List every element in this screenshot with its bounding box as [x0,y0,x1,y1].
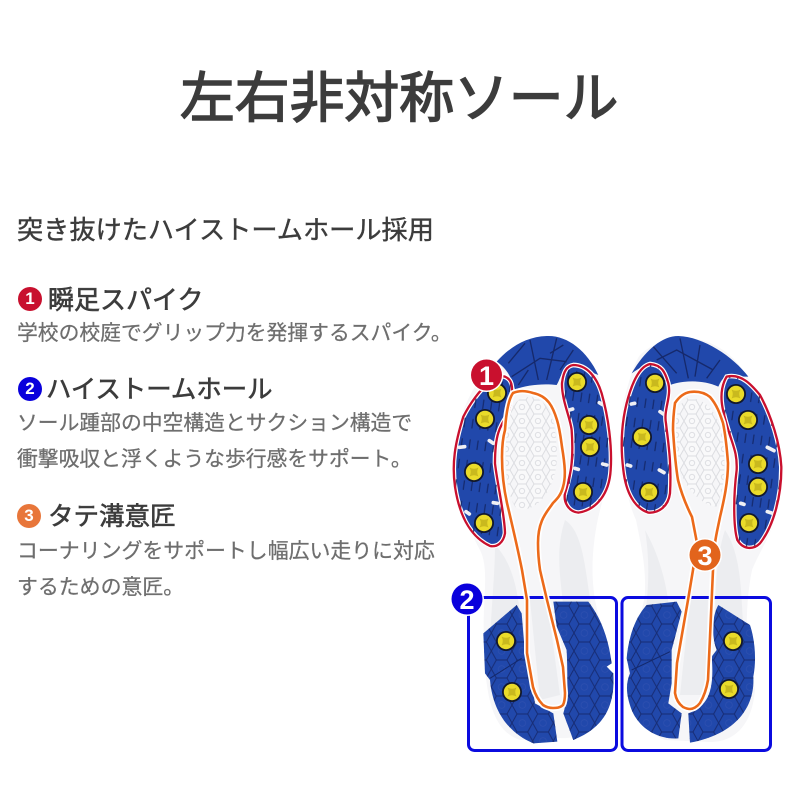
left toe tread [497,336,598,389]
left heel tread outer [483,605,557,743]
callout badge 3: 3 [697,541,713,571]
badge 2: 2 [25,379,35,398]
badge 1 [18,287,42,311]
left heel tread inner [553,602,614,740]
right orange groove [673,392,728,709]
right insole hexagon area [675,398,724,507]
right shoe white midsole [621,338,781,742]
right shoe [621,336,781,743]
left shoe [454,336,614,743]
description 3 [17,540,435,599]
badge 2 [18,377,42,401]
badge 3 [17,504,41,528]
left outer spike panel (red outline) [454,376,512,546]
yellow spikes [464,372,768,702]
right toe tread [632,336,748,387]
right heel tread inner [688,605,755,743]
callout badge 1 [470,358,504,392]
heading 3: タテ溝意匠 [48,503,176,531]
blue highlight boxes [468,598,770,750]
left shoe midsole shading [490,520,598,700]
feature 1: spike [17,285,452,345]
right shoe midsole shading [640,530,745,695]
feature 2: high storm hole [17,376,412,471]
description 2: 衝撃吸収と浮くような歩行感をサポート。 [17,448,412,471]
description 1: 学校の校庭でグリップ力を発揮するスパイク。 [17,322,452,345]
right right-side spike panel (red outline) [721,376,781,548]
left shoe white midsole [458,340,611,740]
badge 3: 3 [24,506,34,525]
callout badge 3 [688,538,722,572]
left orange groove [502,391,565,708]
feature 3: vertical groove design [17,503,435,599]
title: 左右非対称ソール [180,67,618,129]
description 3: するための意匠。 [17,576,184,599]
orange groove outlines [502,391,728,709]
right heel tread outer [627,602,682,738]
heading 1: 瞬足スパイク [48,285,203,315]
left inner spike panel (red outline) [562,365,611,513]
heading 2: ハイストームホール [46,376,272,404]
subtitle: 突き抜けたハイストームホール採用 [17,215,434,245]
callout badge 2: 2 [459,585,475,615]
left insole hexagon area [506,397,557,510]
callout badge 2 [450,582,484,616]
badge 1: 1 [25,289,35,308]
right left-side spike panel (red outline) [622,364,670,513]
description 2 [17,412,412,471]
description 2: ソール踵部の中空構造とサクション構造で [17,412,412,435]
description 3: コーナリングをサポートし幅広い走りに対応 [17,540,435,563]
callout badge 1: 1 [479,361,494,391]
